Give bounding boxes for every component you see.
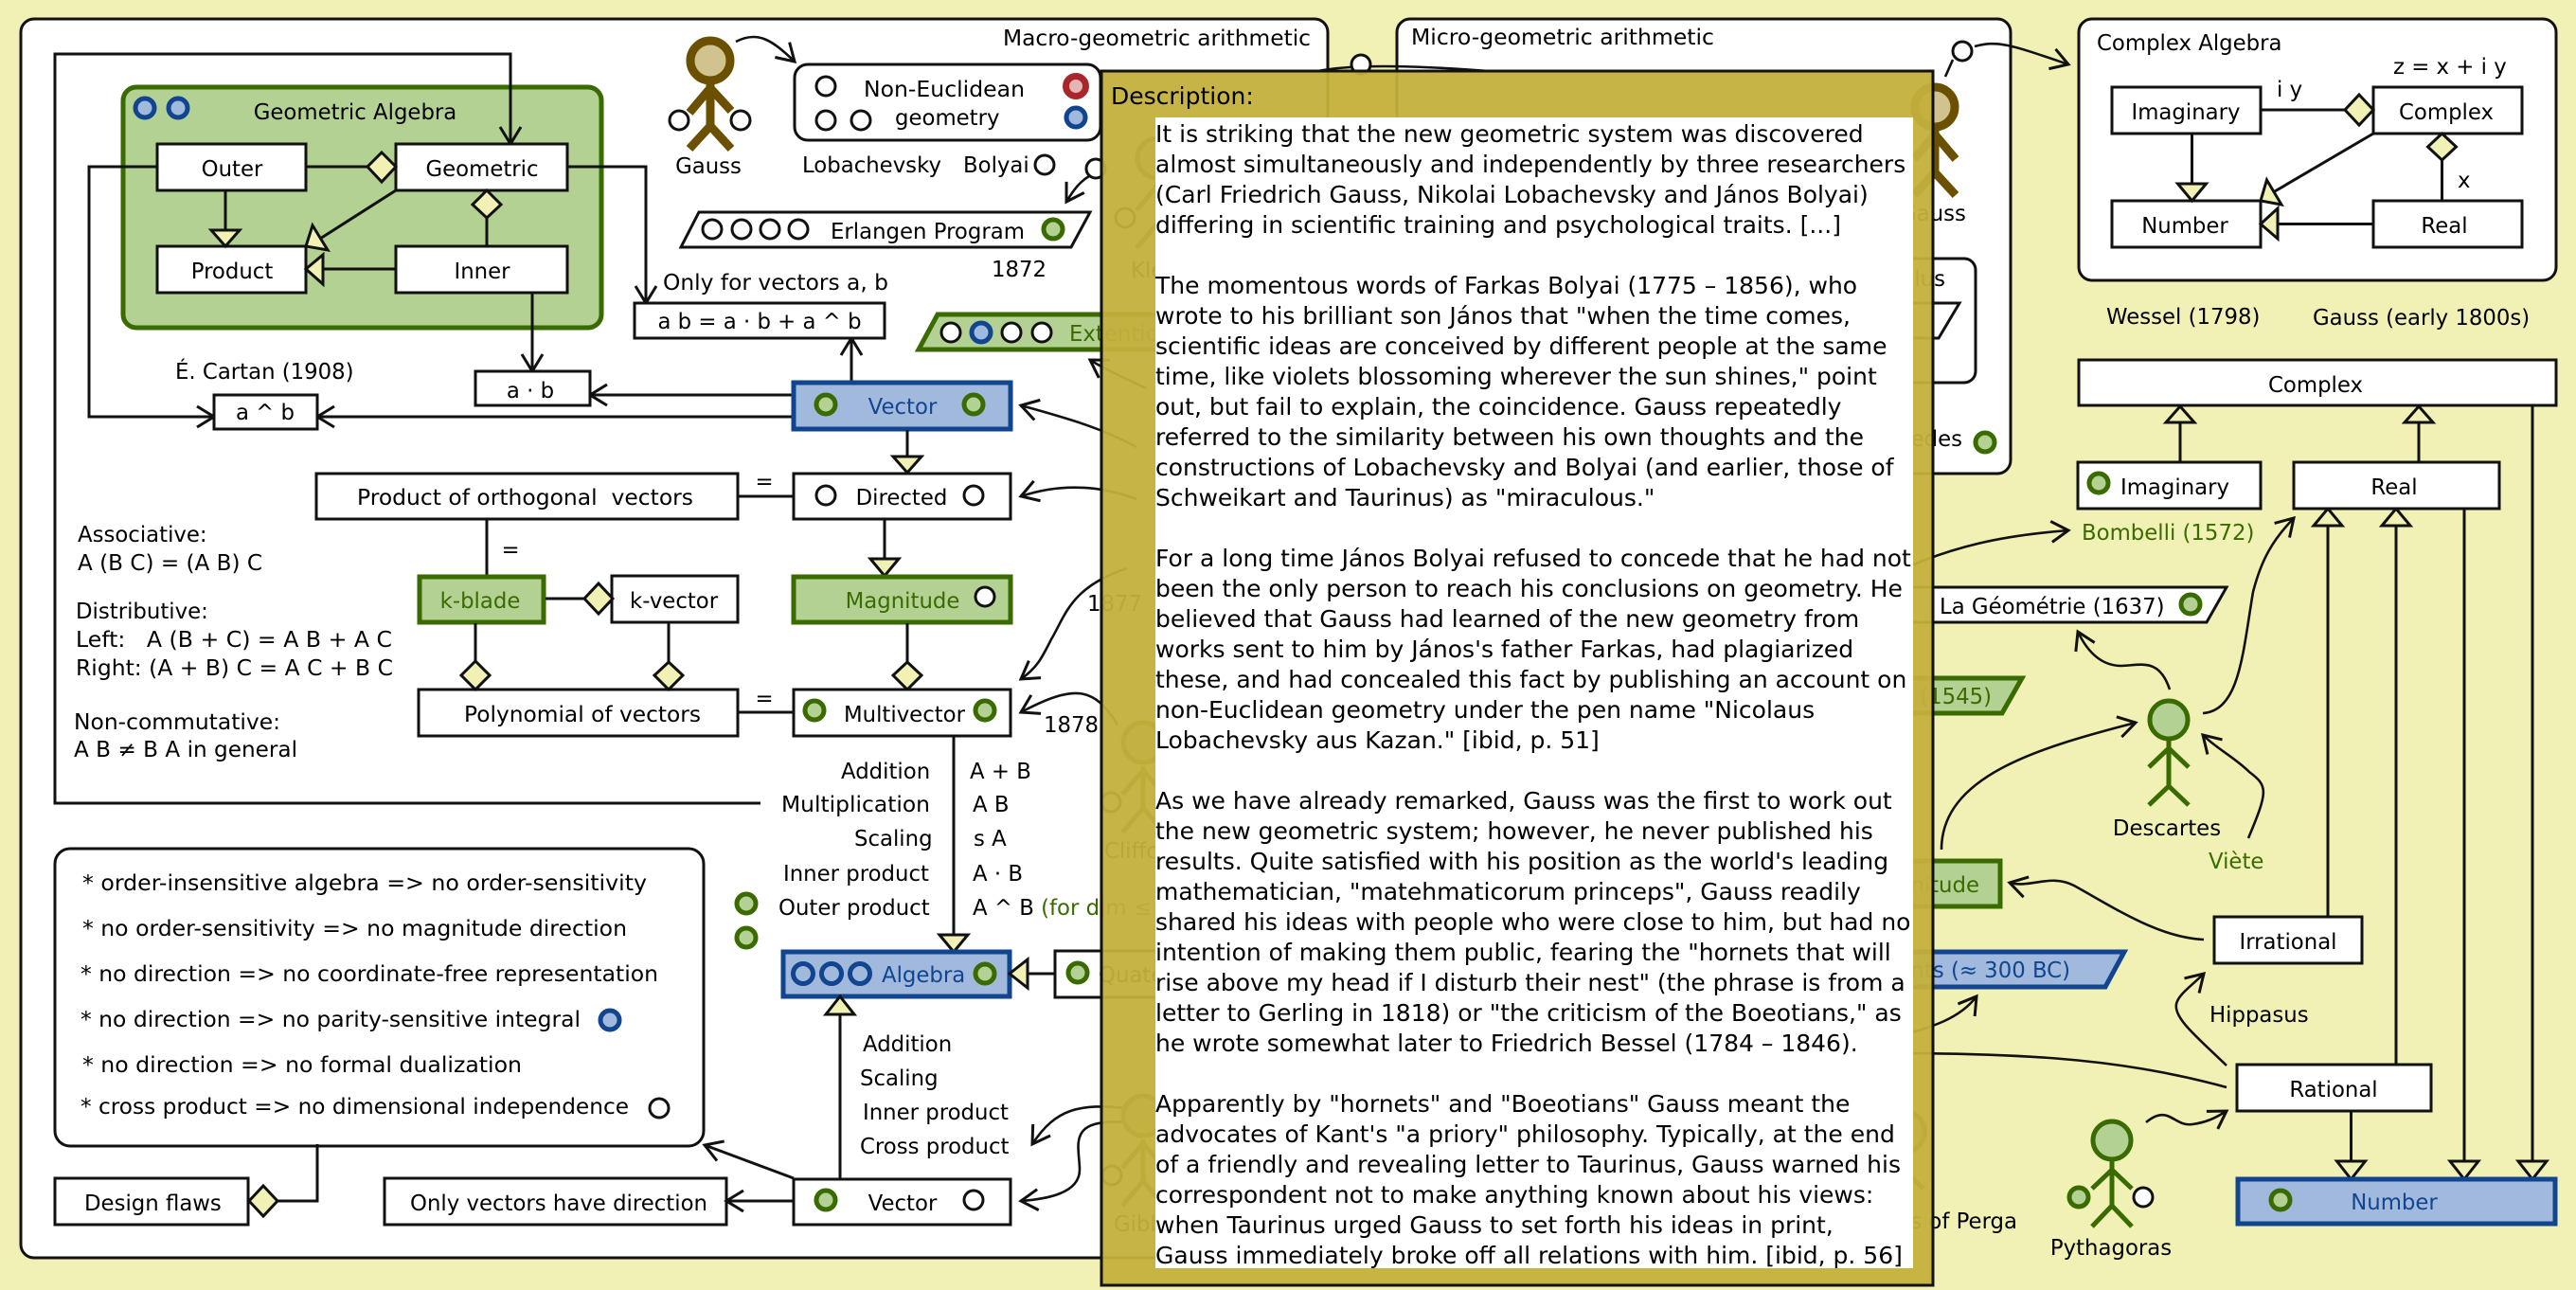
text: algebra laws: Distributive: [76,600,208,624]
panel: calculus [1780,259,1976,383]
label: Viète: Viète [2209,850,2263,874]
actor: Gauss (micro) [1900,87,1966,226]
text: vector operations: Cross product [860,1135,1009,1159]
aggregation: Magnitude to Multivector [893,623,921,690]
box: Quaternion [1055,951,1282,997]
text: operations list: Outer product [778,896,930,921]
panel: geometric algebra: Product [191,260,273,284]
popup text background [1155,117,1913,1268]
inheritance: Directed to Magnitude [870,519,899,576]
popup body text: these, and had concealed this fact by publishing an account on [1155,666,1906,693]
label: Apollonius of Perga [1810,1111,2017,1234]
incoming arrows from popup side [1021,360,1146,1201]
text: vector operations: Scaling [860,1066,939,1091]
box: k-blade: k-blade [440,589,520,614]
box: Algebra: Algebra [882,963,965,988]
arrow: Vector to only vectors [726,1199,794,1203]
popup body text: wrote to his brilliant son János that "when the time comes, [1155,302,1851,330]
banner: Erlangen Program [681,212,1090,247]
panel: complex algebra: x [2458,169,2470,193]
popup body text: scientific ideas are conceived by different people at the same [1155,332,1887,360]
label: only for vectors: Only for vectors a, b [663,271,888,296]
ghost actor: Klein [1116,138,1184,283]
box: Multivector [794,690,1011,736]
box: k-vector [612,576,738,622]
panel: geometric algebra: Inner [454,260,510,284]
arrows around Descartes [1941,518,2294,850]
box: non-Euclidean geometry: Non-Euclidean [864,78,1025,102]
popup body text: he wrote somewhat later to Friedrich Bessel (1784 – 1846). [1155,1030,1858,1057]
box: Vector (blue) [794,383,1011,429]
box: Complex: Complex [2268,373,2363,398]
panel: design flaws list: * no direction => no coordinate-free representation [80,962,658,987]
text: operations list: A · B [973,862,1023,887]
banner: Elements: Elements (≈ 300 BC) [1843,959,2070,983]
panel: complex algebra: Complex [2399,100,2494,125]
popup body text: It is striking that the new geometric system was discovered [1155,120,1864,148]
popup body text: constructions of Lobachevsky and Bolyai (and earlier, those of [1155,454,1895,481]
label: Hippasus: Hippasus [2209,1003,2309,1028]
ghost actor: Clifford: Clifford [1104,839,1182,864]
label: Cartan: É. Cartan (1908) [175,358,354,385]
popup body text: referred to the similarity between his own thoughts and the [1155,423,1864,451]
box: Magnitude (right): Magnitude [1865,873,1979,898]
box: k-vector: k-vector [630,589,719,614]
ghost actor: Klein: Klein [1131,259,1184,283]
popup body text: Apparently by "hornets" and "Boeotians" Gauss meant the [1155,1090,1850,1118]
text: operations list: Scaling [854,827,933,851]
arrow: Klein to Erlangen [1066,159,1105,202]
text: vector operations [860,1032,1009,1159]
box: Vector (lower) [794,1179,1011,1225]
actor: Descartes [2113,701,2221,841]
text: vector operations: Inner product [863,1101,1009,1125]
popup body text: letter to Gerling in 1818) or "the criticism of the Boeotians," as [1155,999,1902,1027]
panel: complex algebra: Real [2421,214,2468,239]
panel: geometric algebra: Geometric [425,157,539,182]
box: Vector (lower): Vector [868,1191,938,1216]
box: Directed: Directed [856,486,947,511]
banner: Ars Magna: Ars Magna (1545) [1798,685,1992,709]
status dots [737,894,756,947]
text: operations list: A + B [970,760,1031,784]
popup body text: intention of making them public, fearing the "hornets that will [1155,939,1891,966]
popup body text: time, like violets blossoming wherever the sun shines," point [1155,363,1877,390]
popup body text: correspondent not to make anything known about his views: [1155,1181,1873,1209]
popup body text: differing in scientific training and psychological traits. [...] [1155,211,1841,239]
banner: Erlangen Program: Erlangen Program [831,220,1025,244]
popup body text: advocates of Kant's "a priory" philosophy. Typically, at the end [1155,1120,1895,1148]
popup body text: almost simultaneously and independently by three researchers [1155,151,1905,178]
panel: design flaws list: * order-insensitive algebra => no order-sensitivity [82,871,647,896]
panel: geometric algebra [123,54,601,328]
text: algebra laws: Right: (A + B) C = A C + B C [76,656,393,681]
banner: La Géométrie [1780,587,2227,622]
labels: Wessel and Gauss: Wessel (1798) [2106,305,2260,330]
popup body text: been the only person to reach his conclusions on geometry. He [1155,575,1903,602]
box: Real [2294,462,2499,509]
inheritance into Number [2337,1161,2547,1179]
text: operations list: Multiplication [781,793,930,817]
label: 1872: 1872 [992,258,1046,282]
box: Imaginary: Imaginary [2120,475,2229,500]
label: Lobachevsky and Bolyai [802,153,1054,178]
popup body text: mathematician, "matehmaticorum princeps", Gauss readily [1155,878,1861,905]
box: only vectors have direction [385,1178,726,1225]
box: Multivector: Multivector [844,703,966,727]
panel: design flaws list: * no direction => no formal dualization [82,1053,522,1078]
box: k-blade [420,577,544,622]
popup: description panel [1101,71,1933,1285]
banner: Ars Magna [1690,678,2022,713]
labels: Wessel and Gauss [2106,305,2530,331]
number tower hierarchy lines [2166,405,2532,1161]
box: Irrational: Irrational [2239,930,2337,955]
popup body text: the new geometric system; however, he never published his [1155,817,1873,845]
box: non-Euclidean geometry: geometry [895,106,999,131]
box: a dot b [475,371,590,405]
inheritance: Multivector to Algebra [939,736,968,952]
box: Irrational [2214,917,2362,963]
ghost actor: Gibbs [1102,1096,1175,1237]
arrow: Gauss to complex algebra [1945,42,2068,77]
box: Magnitude: Magnitude [846,589,959,614]
box: product of orthogonal vectors: Product of orthogonal vectors [357,486,693,511]
popup body text: of a friendly and revealing letter to Taurinus, Gauss warned his [1155,1151,1901,1178]
banner: Elements [1762,952,2124,987]
box: Algebra [783,952,1010,996]
text: operations list [778,760,1181,921]
box: Imaginary [2078,462,2261,509]
outer connector loop [55,54,760,803]
text: algebra laws: Non-commutative: [74,710,280,735]
panel title: macro-geometric arithmetic: Macro-geometric arithmetic [1003,27,1311,51]
equals link [738,470,794,496]
popup body text [1154,120,1911,1269]
panel: complex algebra: z = x + i y [2393,55,2507,80]
box: Rational [2237,1065,2431,1111]
box: Vector (blue): Vector [868,395,938,420]
panel: geometric algebra: Geometric Algebra [254,100,456,125]
popup body text: believed that Gauss had learned of the new geometry from [1155,605,1859,633]
panel: micro-geometric arithmetic [1397,19,2011,474]
popup body text: Gauss immediately broke off all relations with him. [ibid, p. 56] [1155,1242,1903,1269]
popup body text: (Carl Friedrich Gauss, Nikolai Lobachevsky and János Bolyai) [1155,181,1869,208]
text: operations list: s A [974,827,1007,851]
arrow: Vector to flaws [705,1145,794,1178]
box: Magnitude [794,577,1011,622]
box: design flaws [55,1178,248,1225]
text: operations list: A B [973,793,1009,817]
arrow: Gauss to non-Euclidean geometry [736,37,795,62]
year labels: 1877 [1087,592,1142,617]
text: algebra laws: A B ≠ B A in general [74,738,297,762]
link: product to k-blade: = [501,538,520,563]
actor: Pythagoras: Pythagoras [2050,1236,2172,1261]
text: vector operations: Addition [863,1032,952,1057]
curve crossing the gap between panels [1318,55,1489,74]
actor: Gauss [670,41,750,179]
box: a dot b: a · b [507,379,554,403]
box: a wedge b: a ^ b [236,401,295,425]
ghost actor: Clifford [1101,723,1182,864]
text: algebra laws: Left: A (B + C) = A B + A C [76,628,392,653]
panel: complex algebra: Imaginary [2131,100,2241,125]
banner: Extension: Extention Theory [1069,322,1254,347]
aggregation: design flaws [249,1144,317,1216]
box: geometric product formula [635,303,885,338]
popup body text: works sent to him by János's father Farkas, had plagiarized [1155,636,1853,663]
panel: macro-geometric arithmetic [21,19,1373,1258]
panel: design flaws list: * no order-sensitivity => no magnitude direction [82,917,627,941]
ghost actor: Gibbs: Gibbs [1114,1212,1175,1237]
equals link: = [755,470,774,494]
box: Number (blue): Number [2351,1191,2438,1215]
box: Number (blue) [2238,1179,2555,1224]
popup body text: when Taurinus urged Gauss to set forth his ideas in print, [1155,1211,1834,1239]
panel: geometric algebra: Outer [202,157,263,182]
label: Lobachevsky and Bolyai: Bolyai [963,153,1029,178]
actor: Gauss (micro): Gauss [1900,202,1966,226]
popup heading: Description: [1111,82,1254,110]
actor: Descartes: Descartes [2113,816,2221,841]
panel: calculus: Calculus [1854,267,1945,292]
banner: Extension [919,314,1373,349]
arrow: to Bombelli [1885,530,2068,578]
panel: complex algebra: Complex Algebra [2097,31,2281,56]
panel: complex algebra: i y [2277,78,2302,102]
popup body text: rise above my head if I disturb their nest" (the phrase is from a [1155,969,1905,996]
box: design flaws: Design flaws [84,1191,222,1216]
label: Bombelli: Bombelli (1572) [2082,521,2254,546]
connectors around the products [89,167,851,417]
box: a wedge b [214,395,317,429]
inheritance: Vector to Directed [893,430,921,473]
panel: design flaws list: * no direction => no parity-sensitive integral [80,1008,581,1032]
box: polynomial of vectors [419,690,738,736]
box: Complex [2079,360,2556,405]
popup body text: results. Quite satisfied with his position as the world's leading [1155,848,1888,875]
box: product of orthogonal vectors [316,474,738,519]
text: algebra laws: Associative: [78,523,207,547]
actor: Pythagoras [2050,1121,2172,1261]
label: Lobachevsky and Bolyai: Lobachevsky [802,153,941,178]
year labels: 1878 [1044,713,1099,738]
labels: Wessel and Gauss: Gauss (early 1800s) [2313,306,2530,331]
label: Apollonius of Perga: Apollonius of Perga [1810,1209,2017,1234]
popup body text: The momentous words of Farkas Bolyai (1775 – 1856), who [1154,272,1857,299]
panel: complex algebra [2079,19,2556,280]
year labels [1044,592,1142,738]
box: polynomial of vectors: Polynomial of vectors [464,703,701,727]
popup body text: shared his ideas with people who were close to him, but had no [1155,908,1910,936]
text: algebra laws [74,523,393,762]
box: non-Euclidean geometry [795,64,1100,140]
box: Quaternion: Quaternion [1099,963,1219,988]
actor: Gauss: Gauss [675,154,742,179]
box: Magnitude (right) [1799,861,2000,906]
equals link [738,687,794,712]
popup body text: non-Euclidean geometry under the pen name "Nicolaus [1155,696,1815,724]
panel: complex algebra: Number [2141,214,2228,239]
inheritance: Vector to Algebra [826,996,854,1179]
box: Rational: Rational [2289,1078,2378,1102]
box: Directed [794,474,1011,519]
text: operations list: A ^ B (for dim ≤ 3) [973,896,1181,921]
inheritance: Quaternion to Algebra [1010,959,1055,988]
label: Archimedes: Archimedes [1835,427,1962,452]
box: Real: Real [2370,475,2418,500]
arrows around Irrational and Rational [1894,881,2227,1124]
box: only vectors have direction: Only vectors have direction [410,1191,707,1216]
link: product to k-blade [487,519,520,575]
popup body text: out, but fail to explain, the coincidence. Gauss repeatedly [1155,393,1842,421]
banner: La Géométrie: La Géométrie (1637) [1940,595,2165,619]
panel: design flaws list: * cross product => no dimensional independence [80,1095,629,1120]
popup body text: Schweikart and Taurinus) as "miraculous." [1155,484,1655,511]
panel title: micro-geometric arithmetic: Micro-geometric arithmetic [1411,26,1714,50]
popup body text: Lobachevsky aus Kazan." [ibid, p. 51] [1155,726,1600,754]
text: operations list: Addition [841,760,930,784]
panel: design flaws list [55,849,704,1146]
popup body text: For a long time János Bolyai refused to concede that he had not [1155,545,1911,572]
text: operations list: Inner product [783,862,929,887]
popup body text: As we have already remarked, Gauss was the first to work out [1155,787,1892,815]
aggregation links [461,583,683,690]
box: geometric product formula: a b = a · b + a ^ b [657,310,862,334]
text: algebra laws: A (B C) = (A B) C [78,551,262,576]
equals link: = [755,687,774,711]
